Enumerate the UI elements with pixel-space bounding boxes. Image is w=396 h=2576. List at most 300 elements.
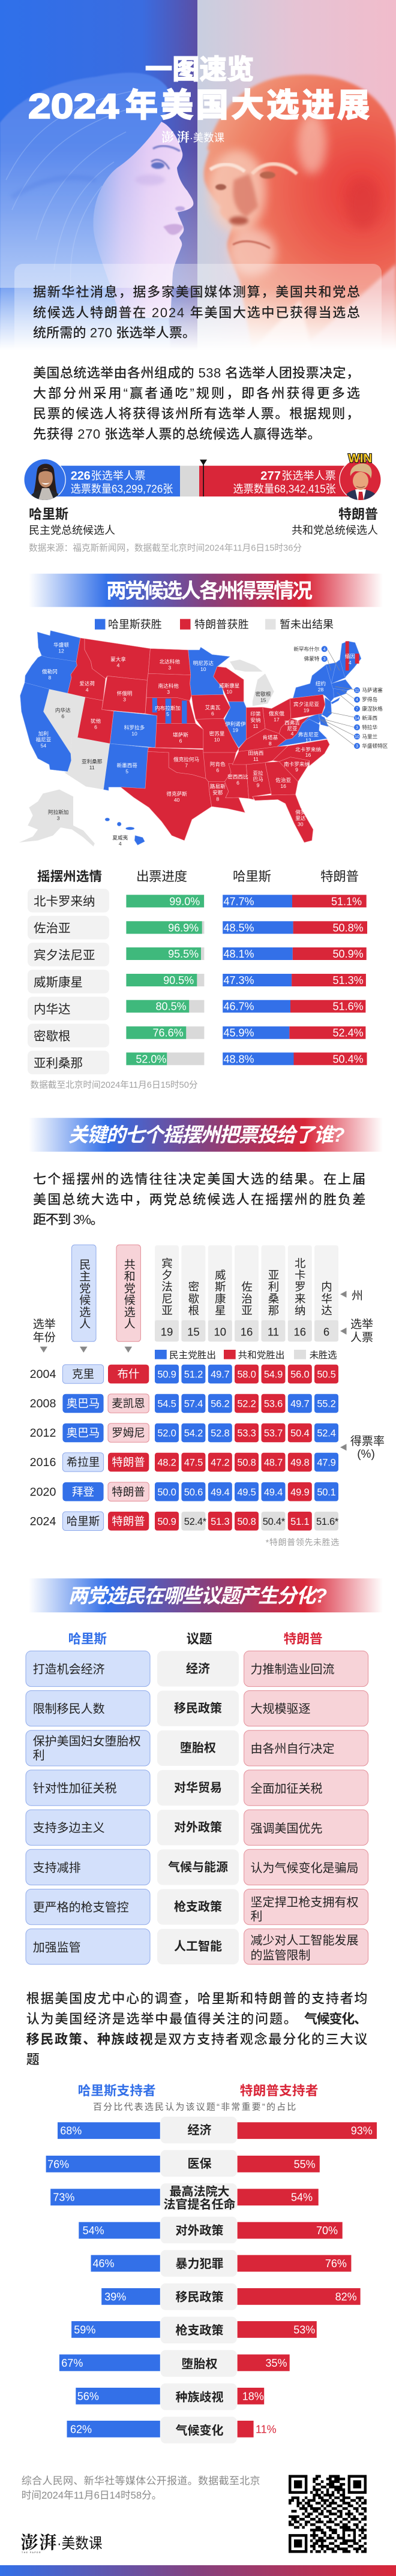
state labels: 16 [280, 783, 286, 789]
row 2004: 51.2 [184, 1370, 203, 1380]
state labels: 亚拉 [253, 770, 263, 776]
table headers: 摇摆州选情 [37, 869, 102, 884]
state column headers: 19 [161, 1325, 173, 1338]
row 2004: 56.0 [290, 1370, 309, 1380]
state labels: 6 [61, 713, 64, 719]
vote share bars Trump: 50.9% [333, 948, 364, 960]
issue names: 对外政策 [175, 2223, 223, 2238]
vote count progress bars: 96.9% [168, 922, 199, 934]
text: Pew survey summary: 题。 [26, 2052, 47, 2067]
state labels: 4 [291, 731, 294, 737]
state labels: 堪萨斯 [173, 732, 188, 738]
row 2016: 48.2 [157, 1458, 176, 1468]
state labels: 4 [86, 687, 89, 693]
paragraph one: 统候选人特朗普在 2024 年美国大选中已获得当选总 [33, 305, 360, 320]
bottom gradient strip [0, 2565, 396, 2576]
text: swing state intro: 距不到 3%。 [33, 1212, 104, 1227]
state column headers: 16 [241, 1325, 253, 1338]
Harris supporter bars: 46% [92, 2258, 115, 2270]
Trump bar [199, 466, 360, 496]
row 2016: 47.5 [184, 1458, 203, 1468]
state labels: 纽约 [316, 681, 326, 687]
small east-coast state callouts: 4 [356, 698, 358, 702]
state labels: 30 [298, 821, 304, 827]
vote share bars Harris [223, 895, 294, 1065]
state labels: 10 [200, 666, 206, 672]
state labels: 路易斯 [210, 784, 226, 790]
state labels: 内布拉斯加 [155, 705, 181, 711]
Trump vote labels [233, 470, 336, 495]
row 2024: 哈里斯 [67, 1515, 100, 1527]
small east-coast state callouts: 11 [355, 688, 359, 693]
paragraph one: 据新华社消息，据多家美国媒体测算，美国共和党总 [33, 285, 360, 300]
vote count progress bars [126, 895, 204, 1065]
state labels: 宾夕法尼亚 [293, 701, 319, 707]
Trump supporter bars: 82% [335, 2291, 357, 2303]
Trump supporter bars: 55% [294, 2158, 316, 2170]
icon: Harris portrait [24, 459, 65, 500]
row 2012: 53.3 [237, 1428, 256, 1439]
row 2008: 奥巴马 [67, 1397, 100, 1410]
row 2016: 50.8 [237, 1458, 256, 1468]
vote share bars Harris: 48.1% [223, 948, 254, 960]
chart footnote: *特朗普领先未胜选 [266, 1537, 339, 1547]
state column headers: 宾夕法尼亚 [161, 1257, 173, 1317]
state labels: 佐治亚 [275, 777, 291, 783]
state column headers: 亚利桑那 [267, 1269, 280, 1317]
state labels: 8 [49, 675, 52, 681]
logo: the paper data class: 澎湃 [20, 2533, 56, 2553]
state names: 密歇根 [34, 1030, 71, 1043]
panel: hero header [0, 0, 396, 350]
states won by Trump [68, 638, 359, 842]
state labels: 11 [89, 765, 95, 771]
row 2012: 54.2 [184, 1428, 203, 1439]
state labels: 明尼苏达 [193, 660, 214, 666]
Trump supporter bars: 54% [291, 2192, 313, 2204]
state labels: 密歇根 [256, 691, 271, 697]
vote share bars Harris: 47.7% [223, 895, 254, 907]
row 2016: 特朗普 [112, 1456, 145, 1468]
text: Pew survey summary [26, 1991, 367, 2067]
column: Democratic candidate: 民主党候选人 [77, 1259, 91, 1329]
state labels: 10 [131, 730, 137, 736]
Harris supporter bars: 73% [53, 2192, 74, 2204]
row 2012: 50.4 [290, 1428, 309, 1439]
state labels: 5 [125, 769, 128, 775]
title line 2: 2024 [28, 87, 119, 126]
column headers: 哈里斯 [68, 1631, 107, 1647]
issue names: 暴力犯罪 [175, 2257, 223, 2271]
Harris supporter bars: 76% [47, 2158, 69, 2170]
panel: footer [0, 2475, 396, 2576]
issue names: 枪支政策 [175, 2323, 223, 2337]
state names: 北卡罗来纳 [34, 895, 95, 908]
state labels: 密西西比 [227, 774, 248, 780]
row 2008: 麦凯恩 [112, 1397, 145, 1410]
state labels: 南卡罗来纳 [284, 761, 310, 767]
source note: 时间2024年11月6日14时58分。 [22, 2490, 161, 2501]
Trump positions: 大规模驱逐 [251, 1702, 311, 1716]
issue chips [161, 2117, 237, 2443]
state labels: 安纳 [250, 717, 261, 723]
issue names: 堕胎权 [181, 2357, 217, 2371]
row 2004: 54.9 [264, 1370, 283, 1380]
chart legend: 共和党胜出 [238, 1350, 284, 1361]
legend: map: 暂未出结果 [280, 619, 334, 631]
logo: the paper data class: THE PAPER [22, 2551, 41, 2554]
Harris positions: 更严格的枪支管控 [33, 1901, 129, 1914]
Harris positions: 支持多边主义 [33, 1821, 105, 1835]
column: Republican candidate [116, 1245, 140, 1353]
axis label: election year [33, 1318, 56, 1353]
small east-coast state callouts: 佛蒙特 [304, 655, 320, 662]
Trump positions: 认为气候变化是骗局 [251, 1861, 359, 1875]
state labels: 8 [216, 796, 219, 802]
row 2008: 2008 [30, 1398, 56, 1410]
heading: state results banner: 两党候选人各州得票情况 [106, 580, 313, 603]
state labels: 怀俄明 [117, 691, 132, 697]
Harris positions [26, 1651, 150, 1964]
Trump vote labels: 张选举人票 [281, 470, 336, 482]
row 2008: 56.2 [211, 1399, 229, 1410]
small east-coast state callouts: 10 [355, 735, 359, 739]
chart legend: 民主党胜出 [169, 1350, 216, 1361]
logo: the paper data class [161, 130, 224, 145]
state labels: 艾奥瓦 [205, 705, 220, 711]
Harris positions: 针对性加征关税 [33, 1781, 117, 1795]
states undecided [19, 660, 274, 847]
row 2020: 50.1 [317, 1487, 336, 1498]
row 2004: 49.7 [211, 1370, 229, 1380]
row 2024: 51.3 [211, 1516, 229, 1527]
issue names [163, 2123, 235, 2437]
vote share bars Harris: 48.5% [223, 922, 254, 934]
state labels: 北达科他 [160, 658, 180, 664]
text: Pew survey summary: 移民政策、种族歧视 [26, 2032, 153, 2047]
row 2024: 50.8 [237, 1516, 256, 1527]
row 2020: 特朗普 [112, 1485, 145, 1498]
column headers: 特朗普 [284, 1631, 323, 1647]
state labels: 19 [233, 727, 238, 733]
state labels: 40 [174, 797, 180, 803]
small east-coast state callouts: 3 [356, 726, 358, 730]
table headers: 哈里斯 [233, 869, 271, 884]
row 2004: 布什 [117, 1368, 140, 1380]
small east-coast state callouts: 新罕布什尔 [293, 645, 320, 652]
Harris positions: 限制移民人数 [33, 1702, 105, 1716]
vote count progress bars: 80.5% [156, 1001, 187, 1013]
small east-coast state callouts: 新泽西 [362, 714, 377, 721]
state names: 内华达 [34, 1003, 71, 1016]
row 2012 [30, 1424, 338, 1442]
state labels: 6 [94, 724, 97, 730]
state labels: 华盛顿 [53, 642, 69, 648]
row 2024 [30, 1512, 339, 1530]
axis label: vote share: (%) [357, 1448, 375, 1461]
state labels: 福尼亚 [36, 736, 52, 742]
issue names: 气候变化 [175, 2423, 223, 2437]
Trump supporter bars: 18% [242, 2390, 264, 2402]
state labels: 10 [214, 736, 220, 742]
row 2012: 2012 [30, 1427, 56, 1440]
row 2020: 2020 [30, 1486, 56, 1499]
state names: 宾夕法尼亚 [34, 949, 95, 962]
lower left lightening [0, 150, 197, 288]
text: swing state intro [33, 1172, 365, 1227]
vote count progress bars: 52.0% [136, 1053, 166, 1065]
issue names: 种族歧视 [175, 2390, 223, 2405]
state labels: 密苏里 [209, 730, 224, 736]
state labels: 15 [260, 697, 266, 703]
state labels: 威斯康星 [219, 683, 239, 689]
Harris supporter bars: 59% [74, 2324, 95, 2336]
Harris bar [48, 466, 180, 496]
row 2012: 罗姆尼 [112, 1427, 145, 1439]
title line 2: 年美国大选进展 [125, 88, 370, 124]
Harris name: 民主党总统候选人 [29, 525, 115, 537]
logo: the paper data class: 澎湃 [161, 130, 190, 145]
row 2020: 49.4 [211, 1487, 229, 1498]
paragraph one [33, 285, 360, 341]
row 2012: 52.8 [211, 1428, 229, 1439]
vote share bars Trump: 52.4% [333, 1027, 364, 1039]
axis label: election year: 选举 [33, 1318, 56, 1331]
small east-coast state callouts: 康涅狄格 [362, 705, 383, 712]
small east-coast state callouts: 4 [323, 648, 326, 652]
state labels: 佛罗 [295, 809, 305, 815]
table footnote: 数据截至北京时间2024年11月6日15时50分 [30, 1080, 198, 1090]
state labels: 13 [305, 737, 311, 743]
state labels: 缅因 [345, 654, 355, 660]
state labels: 3 [168, 664, 171, 670]
row 2012: 奥巴马 [67, 1427, 100, 1439]
issue names: 对华贸易 [174, 1781, 222, 1795]
Trump positions: 坚定捍卫枪支拥有权 [251, 1895, 359, 1909]
vote count progress bars: 95.5% [168, 948, 199, 960]
vote count progress bars: 99.0% [169, 895, 200, 907]
text: Pew survey summary: 根据美国皮尤中心的调查，哈里斯和特朗普的支持者均 [26, 1991, 367, 2006]
source note [22, 2475, 260, 2501]
state labels: 9 [257, 783, 260, 789]
row 2024: 特朗普 [112, 1515, 145, 1527]
heading: state results banner [29, 574, 383, 607]
Harris supporter bars [46, 2122, 160, 2437]
axis label: electoral votes [340, 1318, 373, 1344]
state labels: 田纳西 [248, 750, 263, 756]
vote share bars Trump: 50.4% [333, 1053, 364, 1065]
Harris positions: 打造机会经济 [33, 1662, 105, 1676]
row 2020: 50.6 [184, 1487, 203, 1498]
text: Pew survey summary: 是双方支持者观念最分化的三大议 [154, 2032, 367, 2047]
chart: swing state history table [30, 1245, 385, 1547]
state labels: 11 [253, 756, 259, 762]
state labels: 阿拉斯加 [48, 809, 68, 815]
state labels: 17 [274, 717, 280, 723]
Nebraska district stripes [152, 698, 187, 724]
data source note: 数据来源：福克斯新闻网，数据截至北京时间2024年11月6日15时36分 [29, 543, 302, 553]
fade to white [0, 288, 396, 350]
Trump supporter bars: 70% [316, 2225, 338, 2237]
issue names: 最高法院大 [169, 2184, 229, 2199]
state labels: 6 [236, 780, 239, 786]
state labels: 阿肯色 [210, 761, 226, 767]
state labels: 北卡罗来纳 [295, 747, 321, 753]
axis label: election year: 年份 [33, 1331, 56, 1344]
Trump positions: 由各州自行决定 [251, 1742, 335, 1756]
state labels: 4 [117, 662, 120, 668]
column headers: 议题 [187, 1631, 212, 1647]
row 2008: 54.5 [157, 1399, 176, 1410]
state names: 佐治亚 [34, 922, 71, 935]
Trump supporter bars [238, 2122, 377, 2437]
paragraph two: 大部分州采用“赢者通吃”规则，即各州获得更多选 [33, 386, 360, 401]
state labels: 3 [123, 697, 126, 703]
vote count progress bars: 90.5% [163, 974, 194, 986]
Trump positions: 的监管限制 [251, 1948, 311, 1962]
small east-coast state callouts: 马里兰 [362, 733, 377, 739]
panel: swing state vote table [28, 869, 367, 1090]
row 2016: 49.8 [290, 1458, 309, 1468]
text: swing state intro: 美国总统大选中，两党总统候选人在摇摆州的胜负差 [33, 1192, 365, 1207]
row 2012: 52.0 [157, 1428, 176, 1439]
row 2020: 49.5 [237, 1487, 256, 1498]
state labels: 尼亚 [287, 726, 298, 732]
state labels: 54 [41, 742, 46, 748]
row 2024: 50.4* [263, 1516, 286, 1527]
paragraph one: 统所需的 270 张选举人票。 [33, 326, 196, 341]
row 2020: 拜登 [72, 1485, 94, 1498]
row 2016: 47.9 [317, 1458, 336, 1468]
logo: the paper data class: ·美数课 [190, 132, 224, 144]
state labels: 加利 [38, 730, 49, 736]
state labels: 巴马 [253, 777, 263, 783]
row 2004 [30, 1365, 338, 1383]
Harris supporter bars: 62% [70, 2423, 92, 2435]
row 2024: 51.6* [316, 1516, 339, 1527]
axis label: electoral votes: 人票 [350, 1331, 373, 1344]
state labels: 西弗吉 [284, 720, 300, 726]
hero background right [197, 0, 396, 350]
chart: US state map [19, 631, 388, 847]
Trump supporter bars: 35% [265, 2357, 287, 2369]
title line 1: 一图速览 [145, 54, 254, 85]
row 2020: 50.0 [157, 1487, 176, 1498]
state names: 威斯康星 [34, 976, 83, 989]
small east-coast state callouts: 罗得岛 [362, 696, 377, 703]
state column headers: 6 [323, 1325, 329, 1338]
state labels: 12 [58, 648, 64, 654]
logo: the paper data class [20, 2533, 102, 2554]
Trump positions: 全面加征关税 [251, 1782, 323, 1795]
state names: 亚利桑那 [34, 1057, 83, 1070]
chart: electoral vote bar [24, 452, 380, 553]
state labels: 4 [119, 841, 122, 847]
Trump positions: 减少对人工智能发展 [251, 1933, 359, 1947]
state labels: 犹他 [91, 718, 101, 724]
issue names: 医保 [187, 2157, 211, 2171]
row 2008: 57.4 [184, 1399, 203, 1410]
row 2004: 2004 [30, 1368, 56, 1381]
Harris supporter bars: 56% [77, 2390, 99, 2402]
row 2004: 克里 [72, 1368, 94, 1380]
chart headings: 特朗普支持者 [240, 2083, 318, 2098]
state labels: 肯塔基 [262, 735, 278, 741]
state labels: 蒙大拿 [110, 656, 126, 662]
state labels: 4 [349, 660, 352, 666]
state labels: 7 [185, 763, 188, 769]
Trump name [292, 507, 378, 537]
remaining gray segment [180, 466, 199, 496]
chart: issue importance butterfly [46, 2083, 377, 2443]
state labels: 弗吉尼亚 [298, 732, 319, 738]
row 2008: 49.7 [290, 1399, 309, 1410]
axis label: state: 州 [352, 1290, 363, 1302]
Trump supporter bars: 76% [325, 2258, 347, 2270]
Harris vote labels [71, 470, 173, 495]
270 threshold marker [200, 459, 207, 496]
state labels: 俄亥俄 [269, 711, 284, 717]
Harris supporter bars: 68% [60, 2125, 82, 2137]
state labels: 3 [57, 815, 60, 821]
state labels: 19 [304, 707, 309, 713]
issue names: 经济 [186, 1661, 210, 1675]
text: Pew survey summary: 气候变化、 [304, 2012, 367, 2027]
axis label: vote share: 得票率 [350, 1434, 385, 1448]
vote share bars Trump: 51.6% [333, 1001, 364, 1013]
row 2020: 49.4 [264, 1487, 283, 1498]
state labels: 安那 [212, 789, 223, 796]
row 2016: 2016 [30, 1456, 56, 1469]
vote share bars Harris: 45.9% [223, 1027, 254, 1039]
illustration: Harris profile [0, 73, 193, 350]
Trump positions: 强调美国优先 [251, 1822, 323, 1835]
state labels: 6 [211, 711, 214, 717]
row 2016 [30, 1453, 338, 1471]
vote share bars Harris: 48.8% [223, 1053, 254, 1065]
issue names [157, 1651, 239, 1964]
issue names: 法官提名任命 [163, 2197, 235, 2211]
state labels [36, 641, 355, 847]
legend: map [95, 619, 334, 631]
row 2008: 53.6 [264, 1399, 283, 1410]
issue names: 人工智能 [174, 1940, 222, 1954]
Trump positions [244, 1651, 368, 1964]
row 2020 [30, 1482, 338, 1501]
state labels: 6 [216, 767, 219, 773]
vote count progress bars: 76.6% [153, 1027, 184, 1039]
Harris supporter bars: 67% [61, 2357, 83, 2369]
table headers [37, 869, 359, 884]
legend: map: 特朗普获胜 [194, 619, 249, 631]
heading: issues banner [29, 1578, 383, 1612]
small east-coast state callouts: 14 [355, 717, 359, 721]
heading: seven swing states banner [29, 1118, 383, 1152]
state labels: 28 [318, 687, 323, 693]
state labels: 南达科他 [158, 683, 179, 689]
state column headers: 威斯康星 [214, 1269, 226, 1317]
Harris name: 哈里斯 [29, 507, 68, 522]
Harris vote labels: 张选举人票 [91, 470, 145, 482]
state labels: 伊利诺伊 [225, 721, 245, 727]
Trump supporter bars: 53% [293, 2324, 315, 2336]
column headers [68, 1631, 323, 1647]
axis label: electoral votes: 选举 [350, 1318, 373, 1331]
Harris supporter bars: 54% [83, 2225, 104, 2237]
vote share bars Trump [289, 895, 367, 1065]
Harris vote labels: 选票数量63,299,726张 [71, 483, 173, 495]
issue names: 移民政策 [174, 1702, 222, 1715]
